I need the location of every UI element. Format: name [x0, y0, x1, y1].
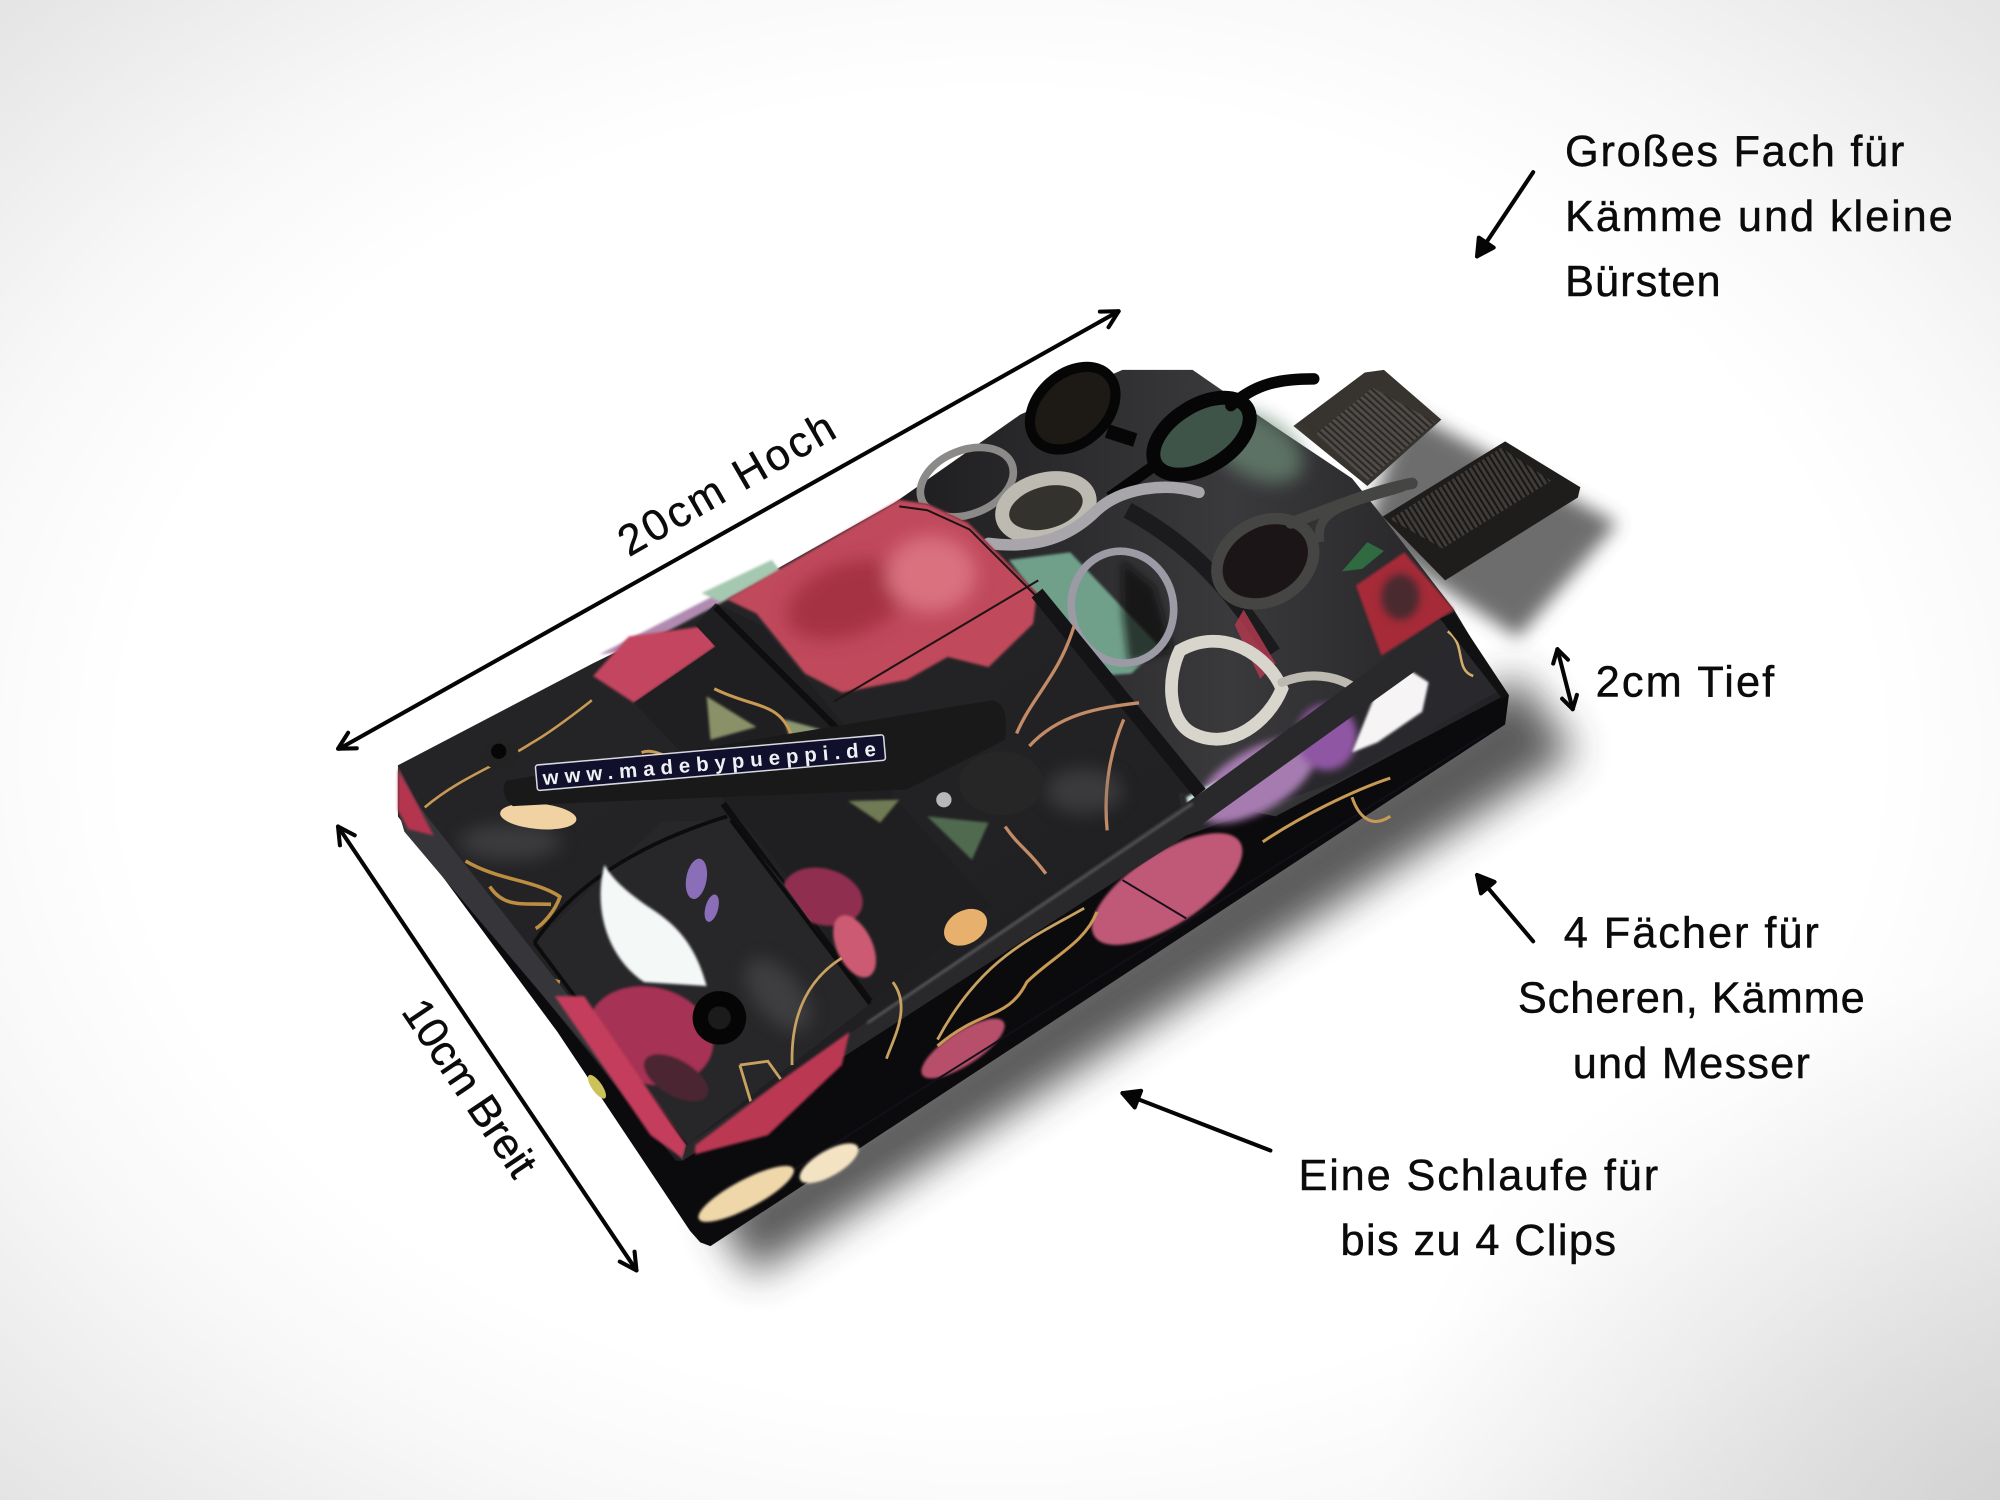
arrow: 20cm Hoch [338, 311, 1119, 749]
snap: upper [481, 741, 519, 769]
lowest pocket buds [683, 857, 722, 923]
label: four compartments: und Messer [1573, 1040, 1810, 1088]
back panel gold lines [938, 778, 1390, 1046]
lip gold lines [886, 908, 1084, 1059]
lowest pocket white leaf [601, 865, 707, 986]
arrow: 10cm Breit [338, 827, 636, 1270]
lowest pocket crimson flower [576, 972, 725, 1111]
label: large compartment: Großes Fach für [1565, 128, 1904, 176]
rear flower: green [1197, 394, 1316, 498]
big red flower [727, 500, 1037, 693]
right panel gold zigzag [1409, 622, 1473, 676]
pouch: flat back panel with loop [398, 695, 1509, 1246]
big pocket stitches [834, 506, 1040, 702]
drop shadow [714, 408, 1617, 1276]
second pocket band [716, 607, 870, 1001]
rear leaf [1342, 542, 1384, 571]
flower: white [1352, 666, 1429, 753]
right panel [1179, 619, 1503, 835]
pink flap [593, 626, 716, 703]
bottom long lip [682, 619, 1444, 1161]
label: four compartments: 4 Fächer für [1564, 910, 1819, 958]
back panel stitch [727, 733, 1486, 1212]
second pocket gold [642, 689, 791, 765]
scissors: silver with ivory ring [989, 469, 1199, 546]
scissors: black with tang [1110, 379, 1314, 497]
label: four compartments: Scheren, Kämme [1518, 975, 1865, 1023]
label: 10cm Breit: 10cm Breit [392, 990, 546, 1186]
label: large compartment [1565, 128, 1953, 306]
lowest pocket gold [740, 958, 842, 1103]
pouch: rear pocket [893, 370, 1505, 816]
rear inner green [1009, 552, 1159, 676]
scissors: ivory front ring [1171, 641, 1369, 739]
flower: purple [1184, 704, 1357, 840]
comb: front [1383, 441, 1580, 580]
right seam of big pocket [1037, 593, 1200, 793]
pouch: front body [398, 500, 1509, 1161]
label: loop [1298, 1152, 1658, 1265]
rose gold lines in big pocket [1005, 626, 1139, 874]
upper left cream flower [499, 800, 577, 832]
second pocket strip [634, 603, 992, 1004]
scissors: black ring back [1014, 350, 1135, 466]
label: four compartments [1518, 910, 1865, 1088]
arrow: four compartments [1477, 875, 1533, 941]
label: large compartment: Kämme und kleine [1565, 193, 1953, 241]
lip highlight [867, 804, 1193, 1023]
scissors: dark grey [1201, 483, 1412, 621]
flower: mint [1186, 781, 1224, 823]
label: 20cm Hoch: 20cm Hoch [610, 403, 844, 566]
label: loop: Eine Schlaufe für [1298, 1152, 1658, 1200]
second pocket leaves [707, 696, 989, 860]
back panel flower: cream [692, 1136, 864, 1231]
snap: lower [693, 991, 746, 1045]
label: large compartment: Bürsten [1565, 258, 1721, 306]
scissors: silver thin ring [1061, 542, 1184, 673]
second pocket flower: crimson [776, 859, 885, 984]
upper left gold [425, 700, 592, 807]
back panel left edge detail [585, 1072, 609, 1101]
top edge lilac and mint [599, 560, 781, 654]
arrow: large compartment [1477, 172, 1533, 256]
scissors [910, 350, 1412, 739]
hair clip [503, 700, 1043, 815]
arrow: depth [1553, 649, 1577, 709]
arrow: loop [1122, 1091, 1270, 1151]
label: depth: 2cm Tief [1596, 658, 1775, 706]
seam lines [534, 816, 870, 1145]
rear band [1128, 510, 1273, 653]
leather sheen [459, 768, 1122, 1043]
label: loop: bis zu 4 Clips [1341, 1217, 1616, 1265]
scissors: silver ring [910, 434, 1024, 530]
cream flower on strip end [937, 901, 994, 953]
left side band [398, 765, 686, 1161]
comb: back [1293, 370, 1441, 486]
clip label: www.madebypueppi.de [541, 739, 877, 790]
rear flower: red [1356, 552, 1454, 656]
lowest pocket [534, 820, 870, 1145]
back panel flower: pink [913, 812, 1259, 1089]
right lip edge [1440, 612, 1509, 699]
